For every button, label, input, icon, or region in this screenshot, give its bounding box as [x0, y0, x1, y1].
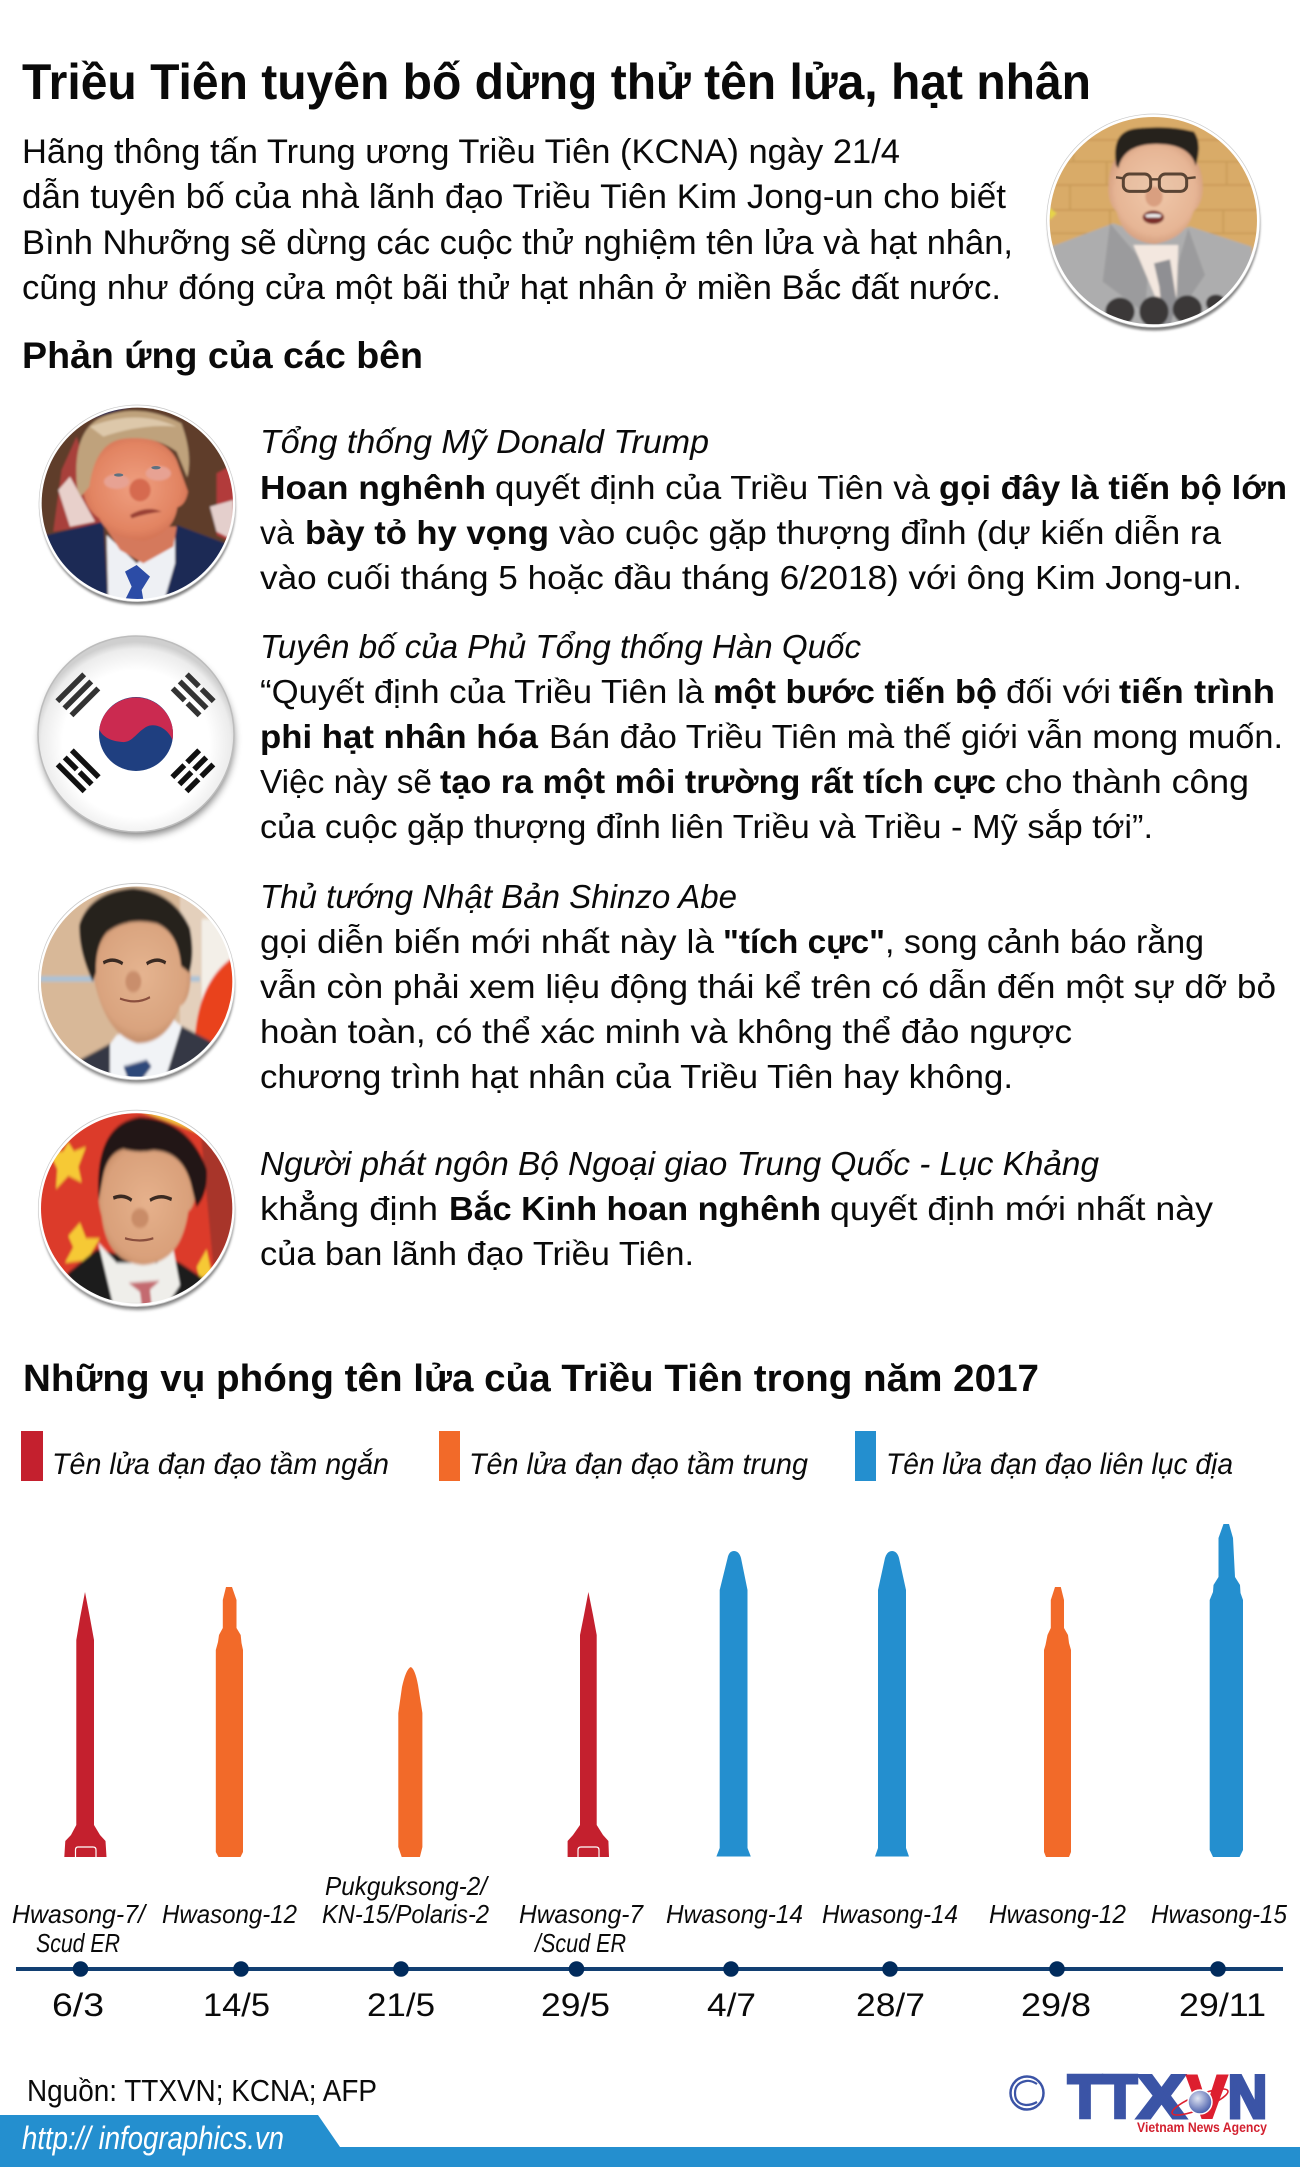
- intro paragraph: [22, 133, 1013, 307]
- footer url: http:// infographics.vn: [22, 2120, 284, 2156]
- reaction text: Trump: gọi đây là tiến bộ lớn: [939, 469, 1287, 506]
- section heading: reactions: Phản ứng của các bên: [22, 335, 423, 376]
- legend: intercontinental: [855, 1431, 1233, 1481]
- missile name labels: Hwasong-12: [989, 1899, 1126, 1929]
- legend: short range: Tên lửa đạn đạo tầm ngắn: [52, 1448, 389, 1481]
- reaction text: Japan: "tích cực": [723, 923, 885, 960]
- reaction text: South Korea: đối với: [1006, 673, 1111, 710]
- rocket: Hwasong-7 / Scud ER, 6/3: [64, 1592, 106, 1857]
- source line: Nguồn: TTXVN; KCNA; AFP: [27, 2073, 377, 2108]
- rocket: Hwasong-15, 29/11: [1210, 1524, 1243, 1857]
- reaction text: China: Người phát ngôn Bộ Ngoại giao Trung Quốc - Lục Khảng: [260, 1145, 1100, 1182]
- missile name labels: [12, 1871, 1287, 1958]
- legend: short range: [21, 1431, 389, 1481]
- reaction text: Trump: Hoan nghênh: [260, 469, 486, 506]
- title: Triều Tiên tuyên bố dừng thử tên lửa, hạt nhân: [22, 54, 1091, 110]
- portrait: Shinzo Abe: [37, 883, 237, 1084]
- icon: copyright: [1010, 2076, 1044, 2110]
- reaction text: Trump: bày tỏ hy vọng: [305, 514, 549, 551]
- reaction text: Japan: gọi diễn biến mới nhất này là: [260, 923, 715, 960]
- reaction text: South Korea: của cuộc gặp thượng đỉnh liên Triều và Triều - Mỹ sắp tới”.: [260, 808, 1153, 845]
- reaction text: China: [260, 1145, 1214, 1272]
- reaction text: Trump: vào cuộc gặp thượng đỉnh (dự kiến diễn ra: [559, 514, 1222, 551]
- intro paragraph: dẫn tuyên bố của nhà lãnh đạo Triều Tiên Kim Jong-un cho biết: [22, 178, 1007, 216]
- intro paragraph: cũng như đóng cửa một bãi thử hạt nhân ở miền Bắc đất nước.: [22, 269, 1001, 307]
- rocket: Hwasong-12, 14/5: [216, 1587, 243, 1857]
- reaction text: South Korea: Việc này sẽ: [260, 763, 432, 800]
- reaction text: Japan: chương trình hạt nhân của Triều Tiên hay không.: [260, 1058, 1013, 1095]
- reaction text: South Korea: Bán đảo Triều Tiên mà thế giới vẫn mong muốn.: [549, 718, 1283, 755]
- portrait: Donald Trump: [38, 404, 237, 606]
- logo: TTXVN: T: [1103, 2064, 1137, 2130]
- launch dates: 29/5: [541, 1987, 610, 2023]
- reaction text: Japan: Thủ tướng Nhật Bản Shinzo Abe: [260, 878, 737, 915]
- legend: medium range: [439, 1431, 808, 1481]
- footer band: [0, 2115, 1300, 2167]
- logo: TTXVN: Vietnam News Agency: [1137, 2119, 1267, 2135]
- reaction text: Japan: , song cảnh báo rằng: [885, 923, 1204, 960]
- launch dates: 14/5: [203, 1987, 270, 2023]
- launch dates: 29/8: [1021, 1987, 1091, 2023]
- launch dates: 29/11: [1179, 1987, 1266, 2023]
- missile name labels: Hwasong-12: [162, 1899, 297, 1929]
- reaction text: Trump: [260, 423, 1287, 596]
- launch dates: [52, 1987, 1266, 2023]
- reaction text: China: khẳng định: [260, 1190, 438, 1227]
- reaction text: South Korea: tạo ra một môi trường rất tích cực: [440, 763, 996, 800]
- rocket: Hwasong-14, 4/7: [716, 1551, 751, 1856]
- timeline: [16, 1961, 1283, 1977]
- rocket: Hwasong-14, 28/7: [875, 1551, 909, 1856]
- reaction text: Japan: hoàn toàn, có thể xác minh và không thể đảo ngược: [260, 1013, 1072, 1050]
- reaction text: China: quyết định mới nhất này: [830, 1190, 1214, 1227]
- logo: TTXVN: X: [1138, 2064, 1185, 2130]
- missile name labels: Hwasong-14: [666, 1899, 803, 1929]
- missile name labels: Hwasong-15: [1151, 1899, 1287, 1929]
- missile name labels: Hwasong-7/: [12, 1899, 148, 1929]
- reaction text: South Korea: cho thành công: [1005, 763, 1249, 800]
- rocket: Pukguksong-2, 21/5: [398, 1667, 422, 1857]
- reaction text: South Korea: “Quyết định của Triều Tiên là: [260, 673, 705, 710]
- missile name labels: KN-15/Polaris-2: [322, 1899, 489, 1929]
- reaction text: South Korea: [260, 628, 1283, 845]
- logo: TTXVN: V: [1187, 2064, 1227, 2130]
- reaction text: Trump: vào cuối tháng 5 hoặc đầu tháng 6/2018) với ông Kim Jong-un.: [260, 559, 1242, 596]
- reaction text: Trump: và: [260, 514, 295, 551]
- reaction text: South Korea: phi hạt nhân hóa: [260, 718, 539, 755]
- launch dates: 28/7: [856, 1987, 925, 2023]
- rocket: Hwasong-12, 29/8: [1044, 1587, 1071, 1857]
- reaction text: South Korea: tiến trình: [1119, 673, 1275, 710]
- missile name labels: Pukguksong-2/: [325, 1871, 490, 1901]
- launch dates: 4/7: [707, 1987, 756, 2023]
- intro paragraph: Hãng thông tấn Trung ương Triều Tiên (KCNA) ngày 21/4: [22, 133, 900, 171]
- missile name labels: /Scud ER: [533, 1928, 626, 1958]
- reaction text: South Korea: Tuyên bố của Phủ Tổng thống Hàn Quốc: [260, 628, 861, 665]
- missile name labels: Hwasong-7: [519, 1899, 644, 1929]
- logo: TTXVN: T: [1068, 2064, 1102, 2130]
- missile name labels: Scud ER: [36, 1928, 120, 1958]
- reaction text: South Korea: một bước tiến bộ: [713, 673, 997, 710]
- launch dates: 6/3: [52, 1987, 104, 2023]
- launch dates: 21/5: [367, 1987, 435, 2023]
- reaction text: China: Bắc Kinh hoan nghênh: [449, 1190, 821, 1227]
- reaction text: China: của ban lãnh đạo Triều Tiên.: [260, 1235, 694, 1272]
- reaction text: Japan: vẫn còn phải xem liệu động thái kể trên có dẫn đến một sự dỡ bỏ: [260, 968, 1276, 1005]
- missile name labels: Hwasong-14: [822, 1899, 958, 1929]
- logo: TTXVN: [1068, 2064, 1267, 2135]
- logo: TTXVN: N: [1228, 2064, 1267, 2130]
- portrait: Lu Kang: [37, 1107, 237, 1312]
- reaction text: Trump: quyết định của Triều Tiên và: [495, 469, 931, 506]
- reaction text: Trump: Tổng thống Mỹ Donald Trump: [260, 423, 709, 460]
- legend: intercontinental: Tên lửa đạn đạo liên lục địa: [886, 1448, 1233, 1481]
- section heading: missile launches: Những vụ phóng tên lửa của Triều Tiên trong năm 2017: [23, 1358, 1039, 1400]
- legend: medium range: Tên lửa đạn đạo tầm trung: [469, 1448, 808, 1481]
- portrait: Kim Jong-un: [1043, 110, 1270, 340]
- intro paragraph: Bình Nhưỡng sẽ dừng các cuộc thử nghiệm tên lửa và hạt nhân,: [22, 224, 1013, 262]
- rocket: Hwasong-7 / Scud ER, 29/5: [568, 1592, 609, 1857]
- icon: South Korea flag: [38, 636, 234, 836]
- reaction text: Japan: [260, 878, 1276, 1095]
